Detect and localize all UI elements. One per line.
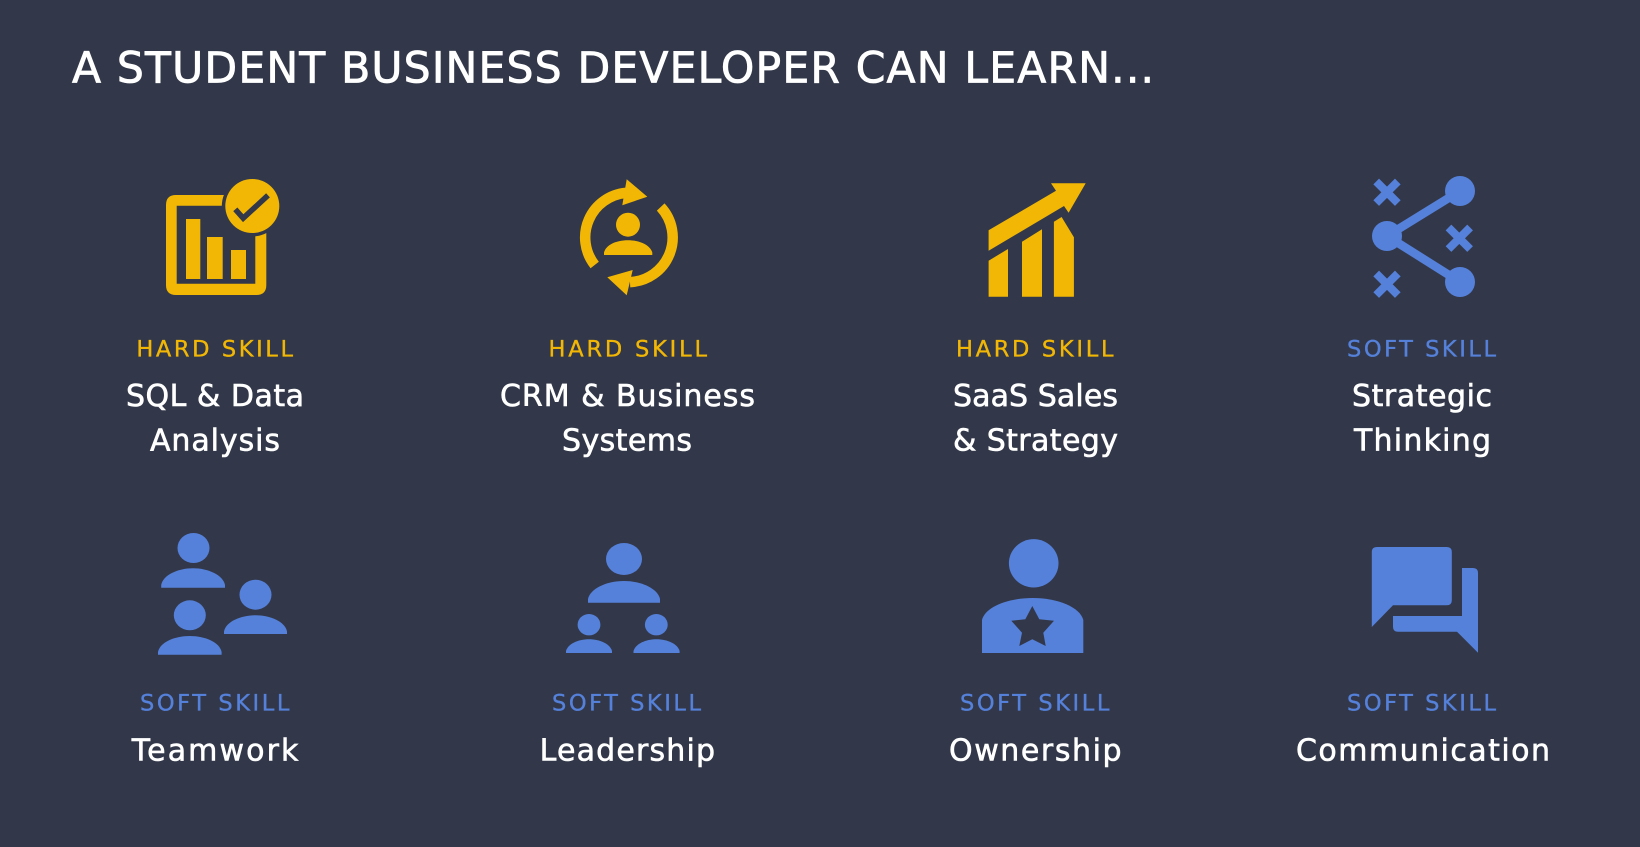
panel: SaaS Sales and Strategy xyxy=(953,183,1118,459)
label: hard skill: HARD SKILL xyxy=(136,337,293,363)
skill name: Communication xyxy=(1296,734,1550,769)
skill name: Leadership xyxy=(540,734,715,769)
skill name xyxy=(500,379,755,459)
skill name: Analysis xyxy=(150,424,280,459)
icon: three people xyxy=(158,533,287,655)
label: soft skill: SOFT SKILL xyxy=(960,691,1110,717)
icon: person in rotating arrows xyxy=(585,179,673,295)
label: hard skill: HARD SKILL xyxy=(548,337,707,363)
panel: SQL and Data Analysis xyxy=(126,176,304,459)
panel: Strategic Thinking xyxy=(1347,176,1496,459)
skill name: & Strategy xyxy=(953,424,1118,459)
label: hard skill: HARD SKILL xyxy=(956,337,1114,363)
icon: bar chart with check badge xyxy=(166,176,283,295)
icon: speech bubbles xyxy=(1372,547,1478,653)
icon: person with star xyxy=(982,539,1083,653)
panel: Ownership xyxy=(949,539,1122,769)
panel: Teamwork xyxy=(131,533,299,769)
skill name: SaaS Sales xyxy=(953,379,1118,414)
skill name: Teamwork xyxy=(131,734,299,769)
label: soft skill: SOFT SKILL xyxy=(1347,337,1496,363)
skill name xyxy=(126,379,304,459)
skill name: SQL & Data xyxy=(126,379,304,414)
skill name: CRM & Business xyxy=(500,379,755,414)
icon: rising bars with arrow xyxy=(989,183,1086,297)
skill name: Systems xyxy=(562,424,692,459)
skill name: Ownership xyxy=(949,734,1122,769)
panel: CRM and Business Systems xyxy=(500,179,755,459)
label: soft skill: SOFT SKILL xyxy=(552,691,701,717)
skill name xyxy=(953,379,1118,459)
label: soft skill: SOFT SKILL xyxy=(140,691,290,717)
title: A STUDENT BUSINESS DEVELOPER CAN LEARN... xyxy=(72,45,1154,94)
icon: leader above two people xyxy=(566,543,680,653)
skill name xyxy=(1352,379,1492,459)
skill name: Thinking xyxy=(1353,424,1491,459)
icon: decision branches with crosses xyxy=(1372,176,1475,297)
panel: Leadership xyxy=(540,543,715,769)
skill name: Strategic xyxy=(1352,379,1492,414)
panel: Communication xyxy=(1296,547,1550,769)
label: soft skill: SOFT SKILL xyxy=(1347,691,1496,717)
